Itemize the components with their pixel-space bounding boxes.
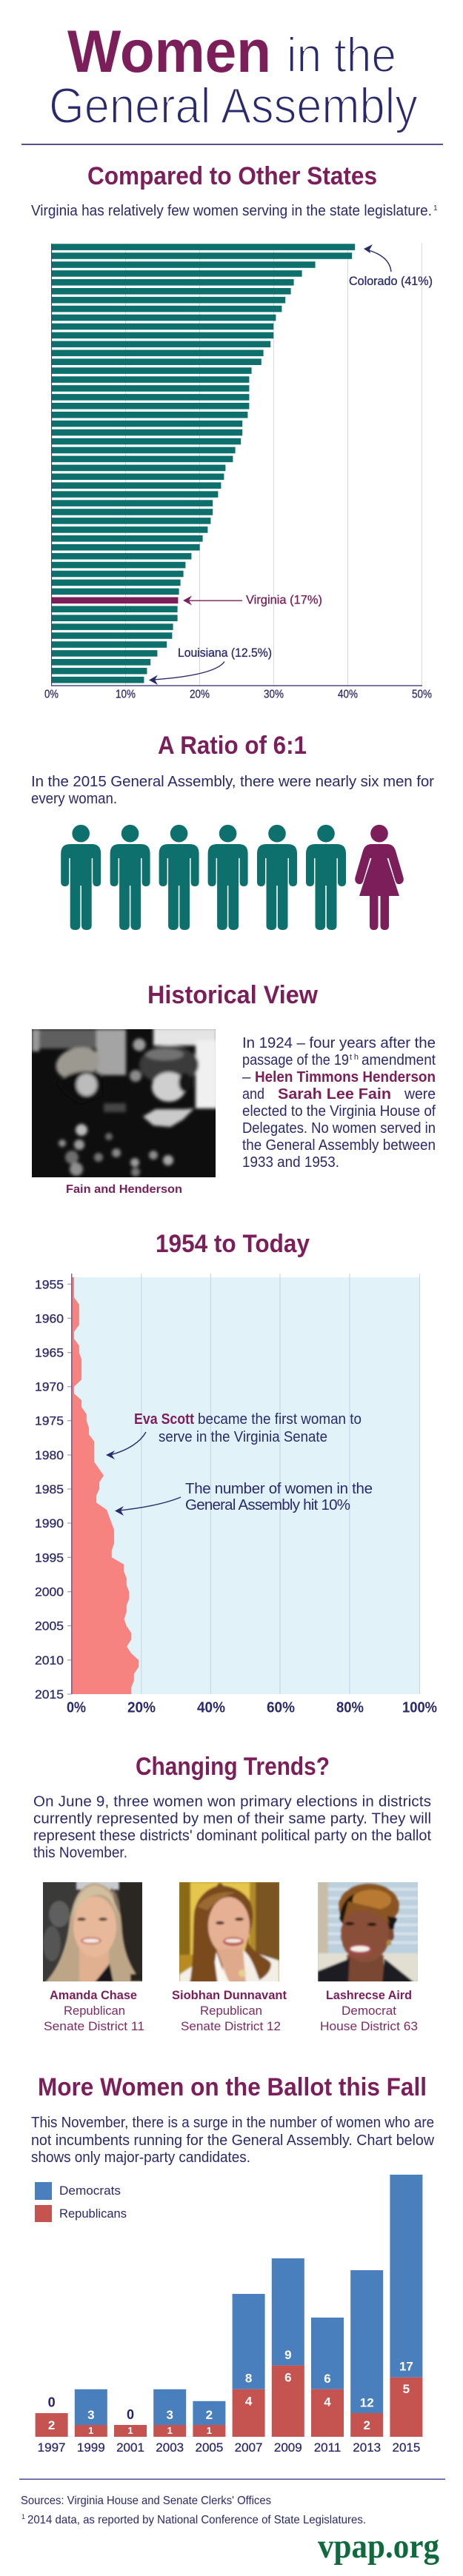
- callout: women hit 10%: The number of women in the: [185, 1480, 373, 1497]
- percent axis labels: 60%: [267, 1700, 295, 1716]
- year labels: [38, 2440, 420, 2455]
- callout: women hit 10%: [115, 1480, 373, 1516]
- historical text: were: [404, 1085, 436, 1103]
- trends text: this November.: [33, 1844, 127, 1861]
- ballot text: [31, 2114, 434, 2166]
- year labels: 2013: [353, 2440, 381, 2455]
- historical text: passage of the 19: [242, 1051, 349, 1068]
- value labels: 2: [48, 2418, 55, 2432]
- callout: Colorado: Colorado (41%): [349, 274, 433, 288]
- historical text: amendment: [362, 1051, 436, 1068]
- historical text: –: [242, 1068, 251, 1085]
- value labels: 8: [245, 2372, 252, 2386]
- historical text: the General Assembly between: [242, 1137, 436, 1154]
- icons: six men, one woman: [61, 825, 404, 930]
- intro text: Virginia has relatively few women serving in the state legislature.: [31, 202, 432, 219]
- heading: 1954 to today: 1954 to Today: [156, 1230, 310, 1258]
- year axis labels: 1995: [35, 1550, 64, 1565]
- year axis labels: 1980: [35, 1448, 64, 1462]
- year labels: 2011: [314, 2440, 341, 2455]
- candidate: Lashrecse Aird: House District 63: [320, 2019, 418, 2033]
- axis labels: 50%: [412, 689, 432, 701]
- value labels: 2: [206, 2408, 213, 2422]
- candidate: Siobhan Dunnavant: [172, 1988, 287, 2033]
- stacked bar chart: candidates by year: [36, 2175, 422, 2455]
- trends text: currently represented by men of their same party. They will: [33, 1810, 431, 1827]
- callout: Louisiana: [149, 646, 272, 685]
- heading: compared to other states: Compared to Other States: [87, 162, 377, 190]
- panel: compared to other states: [31, 162, 438, 701]
- percent axis labels: 0%: [67, 1700, 86, 1716]
- value labels: 6: [324, 2372, 331, 2386]
- intro text: 1: [433, 204, 438, 213]
- axis labels: 10%: [116, 689, 136, 701]
- historical text: and: [242, 1085, 264, 1103]
- historical text: In 1924 – four years after the: [242, 1034, 436, 1051]
- value labels: 1: [88, 2425, 93, 2436]
- candidate: Amanda Chase: [44, 1988, 144, 2033]
- percent axis labels: 100%: [402, 1700, 437, 1716]
- callout: Colorado: [349, 244, 433, 288]
- photo: Siobhan Dunnavant: [179, 1882, 279, 1984]
- candidate: Lashrecse Aird: [320, 1988, 418, 2033]
- value labels: 1: [167, 2425, 173, 2436]
- value labels: 12: [360, 2396, 374, 2410]
- ratio text: every woman.: [31, 790, 117, 807]
- callout: Virginia: Virginia (17%): [246, 593, 322, 607]
- ballot text: This November, there is a surge in the number of women who are: [31, 2114, 434, 2131]
- year labels: 2015: [392, 2440, 420, 2455]
- value labels: 3: [87, 2408, 95, 2422]
- value labels: 1: [207, 2425, 212, 2436]
- year labels: 1997: [38, 2440, 66, 2455]
- value labels: 4: [245, 2394, 253, 2408]
- candidate: Siobhan Dunnavant: Siobhan Dunnavant: [172, 1988, 287, 2002]
- legend: [35, 2182, 127, 2222]
- year labels: 1999: [77, 2440, 105, 2455]
- callout: Louisiana: Louisiana (12.5%): [178, 646, 272, 660]
- candidate: Amanda Chase: Republican: [64, 2004, 125, 2018]
- value labels: 5: [403, 2382, 410, 2396]
- year labels: 2009: [274, 2440, 302, 2455]
- year labels: 2005: [195, 2440, 223, 2455]
- year axis labels: 1955: [35, 1277, 64, 1291]
- value labels: 6: [284, 2371, 292, 2385]
- axis labels: 20%: [190, 689, 210, 701]
- footer: sources: 1: [21, 2513, 25, 2520]
- value labels: 17: [399, 2360, 413, 2374]
- axis labels: 30%: [264, 689, 284, 701]
- candidate: Lashrecse Aird: Lashrecse Aird: [326, 1988, 412, 2002]
- year labels: 2007: [235, 2440, 263, 2455]
- candidate: Siobhan Dunnavant: Senate District 12: [181, 2019, 281, 2033]
- value labels: [48, 2348, 413, 2436]
- year labels: 2003: [156, 2440, 184, 2455]
- axis labels: [44, 689, 432, 701]
- value labels: 1: [127, 2425, 133, 2436]
- heading: a ratio of 6:1: A Ratio of 6:1: [158, 732, 307, 760]
- area chart: women share 1955-2015: [35, 1274, 437, 1716]
- historical text: Delegates. No women served in: [242, 1120, 436, 1137]
- logo: vpap.org: vpap.org: [318, 2527, 439, 2566]
- year axis labels: 1975: [35, 1414, 64, 1428]
- axis labels: 0%: [44, 689, 59, 701]
- candidate: Amanda Chase: Senate District 11: [44, 2019, 144, 2033]
- value labels: 3: [166, 2408, 173, 2422]
- year axis labels: 2005: [35, 1619, 64, 1633]
- panel: historical view: [32, 981, 436, 1196]
- footer: sources: 2014 data, as reported by National Conference of State Legislatures.: [27, 2514, 366, 2526]
- photo: Amanda Chase: [43, 1881, 144, 1983]
- candidate: Lashrecse Aird: Democrat: [342, 2004, 396, 2018]
- title: in the: [287, 27, 396, 82]
- ratio text: [31, 773, 434, 807]
- year axis labels: 2000: [35, 1585, 64, 1599]
- year labels: 2001: [116, 2440, 144, 2455]
- footer: sources: [21, 2495, 366, 2526]
- callout: Virginia: [183, 593, 322, 607]
- year axis labels: 1990: [35, 1516, 64, 1530]
- value labels: 0: [127, 2407, 134, 2422]
- heading: historical view: Historical View: [147, 981, 319, 1009]
- photo: Fain and Henderson: [32, 1028, 218, 1177]
- percent axis labels: 40%: [197, 1700, 225, 1716]
- ratio text: In the 2015 General Assembly, there were nearly six men for: [31, 773, 434, 790]
- heading: changing trends: Changing Trends?: [136, 1753, 330, 1781]
- callout: women hit 10%: General Assembly hit 10%: [185, 1496, 350, 1513]
- panel: changing trends: [33, 1753, 431, 2033]
- trends text: represent these districts' dominant political party on the ballot: [33, 1827, 431, 1844]
- callout: Eva Scott: [106, 1411, 362, 1459]
- year axis labels: 1960: [35, 1311, 64, 1325]
- photo: Lashrecse Aird: [318, 1882, 418, 1983]
- historical text: Sarah Lee Fain: [278, 1085, 391, 1103]
- value labels: 9: [284, 2348, 292, 2362]
- year axis labels: 1965: [35, 1346, 64, 1360]
- legend: Democrats: [59, 2184, 121, 2198]
- callout: Eva Scott: serve in the Virginia Senate: [159, 1428, 327, 1445]
- ballot text: shows only major-party candidates.: [31, 2149, 250, 2166]
- panel: ratio of 6:1: [31, 732, 434, 930]
- panel: 1954 to today: [35, 1230, 437, 1716]
- title: General Assembly: [49, 78, 418, 134]
- trends text: [33, 1793, 431, 1861]
- value labels: 0: [48, 2395, 56, 2410]
- year axis labels: 1985: [35, 1482, 64, 1496]
- trends text: On June 9, three women won primary elections in districts: [33, 1793, 431, 1810]
- title: [49, 19, 418, 134]
- year axis labels: [35, 1277, 64, 1702]
- heading: more women on the ballot: More Women on the Ballot this Fall: [38, 2073, 427, 2101]
- ballot text: not incumbents running for the General Assembly. Chart below: [31, 2132, 434, 2149]
- bar chart: women share by state: [44, 244, 432, 701]
- percent axis labels: 80%: [336, 1700, 364, 1716]
- axis labels: 40%: [338, 689, 358, 701]
- footer: sources: Sources: Virginia House and Senate Clerks' Offices: [21, 2495, 271, 2507]
- historical text: Helen Timmons Henderson: [255, 1068, 436, 1085]
- candidate: Siobhan Dunnavant: Republican: [200, 2004, 262, 2018]
- year axis labels: 1970: [35, 1380, 64, 1394]
- percent axis labels: [67, 1700, 437, 1716]
- percent axis labels: 20%: [127, 1700, 156, 1716]
- historical text: 1933 and 1953.: [242, 1154, 339, 1171]
- callout: Eva Scott: Eva Scott: [134, 1411, 194, 1428]
- panel: more women on the ballot: [31, 2073, 434, 2455]
- year axis labels: 2015: [35, 1687, 64, 1702]
- callout: Eva Scott: became the first woman to: [198, 1411, 362, 1428]
- historical text: [242, 1034, 436, 1171]
- historical text: th: [350, 1053, 359, 1062]
- value labels: 2: [363, 2418, 370, 2432]
- candidate: Amanda Chase: Amanda Chase: [50, 1988, 137, 2002]
- year axis labels: 2010: [35, 1653, 64, 1667]
- photo caption: Fain and Henderson: [66, 1183, 182, 1196]
- historical text: elected to the Virginia House of: [242, 1103, 436, 1120]
- legend: Republicans: [59, 2207, 127, 2221]
- title: Women: [67, 19, 271, 85]
- value labels: 4: [324, 2395, 331, 2409]
